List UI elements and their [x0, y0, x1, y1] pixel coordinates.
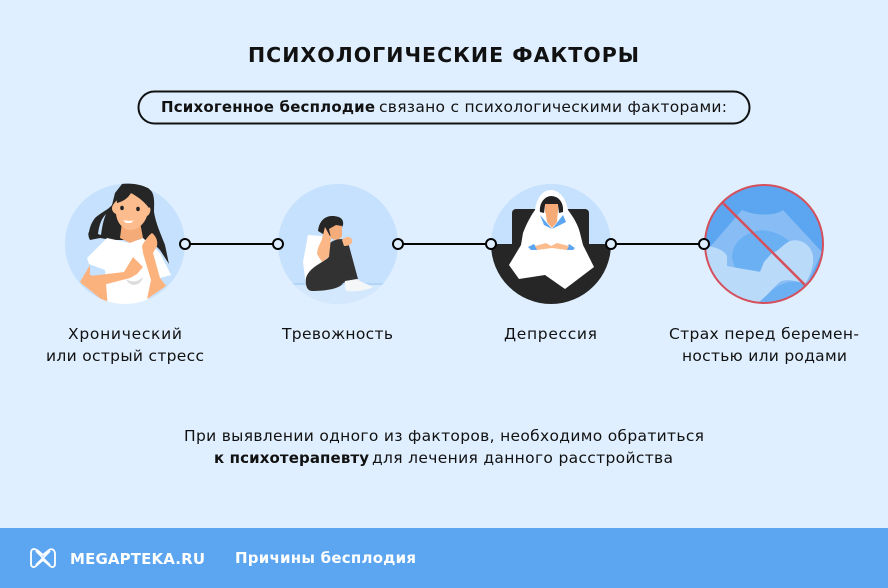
title: ПСИХОЛОГИЧЕСКИЕ ФАКТОРЫ [248, 43, 639, 67]
label: depression: Депрессия [504, 325, 597, 343]
icon: stressed woman [65, 184, 185, 310]
face [112, 193, 150, 230]
icon: anxious person [278, 184, 398, 310]
shoe [345, 279, 373, 291]
icon: depressed person in blanket [491, 184, 611, 310]
upper left arm [80, 265, 108, 302]
intro pill [138, 92, 750, 124]
fringe [116, 186, 150, 208]
collar [540, 215, 566, 229]
shirt [303, 235, 326, 285]
icon: logo [31, 549, 55, 567]
conclusion text [184, 427, 704, 467]
hair [540, 196, 563, 213]
icon: crossed-out ultrasound [704, 185, 823, 310]
conclusion text: для лечения данного расстройства [372, 449, 673, 467]
footer topic: Причины бесплодия [235, 549, 416, 567]
intro pill: Психогенное бесплодие [161, 98, 375, 116]
shirt [87, 238, 171, 310]
blanket [509, 190, 594, 289]
label: anxiety: Тревожность [281, 325, 393, 343]
label: stress: или острый стресс [46, 347, 204, 365]
label: fear of pregnancy [669, 325, 859, 365]
arm [317, 227, 331, 262]
connector lines [180, 239, 709, 249]
left forearm over shirt [81, 257, 143, 287]
label: stress: Хронический [68, 325, 182, 343]
neck [120, 226, 143, 243]
footer bar [0, 528, 888, 588]
right arm [142, 233, 166, 299]
hair back [88, 184, 169, 264]
hands [528, 244, 575, 250]
face [329, 225, 342, 240]
hair [318, 216, 343, 237]
label: fear of pregnancy: Страх перед беремен- [669, 325, 859, 343]
label: fear of pregnancy: ностью или родами [682, 347, 847, 365]
conclusion text: При выявлении одного из факторов, необходимо обратиться [184, 427, 704, 445]
brand name: MEGAPTEKA.RU [70, 550, 205, 568]
label: stress [46, 325, 204, 365]
hand on knee [342, 237, 352, 246]
conclusion text: к психотерапевту [214, 449, 369, 467]
legs [306, 239, 358, 291]
intro pill: связано с психологическими факторами: [379, 98, 727, 116]
